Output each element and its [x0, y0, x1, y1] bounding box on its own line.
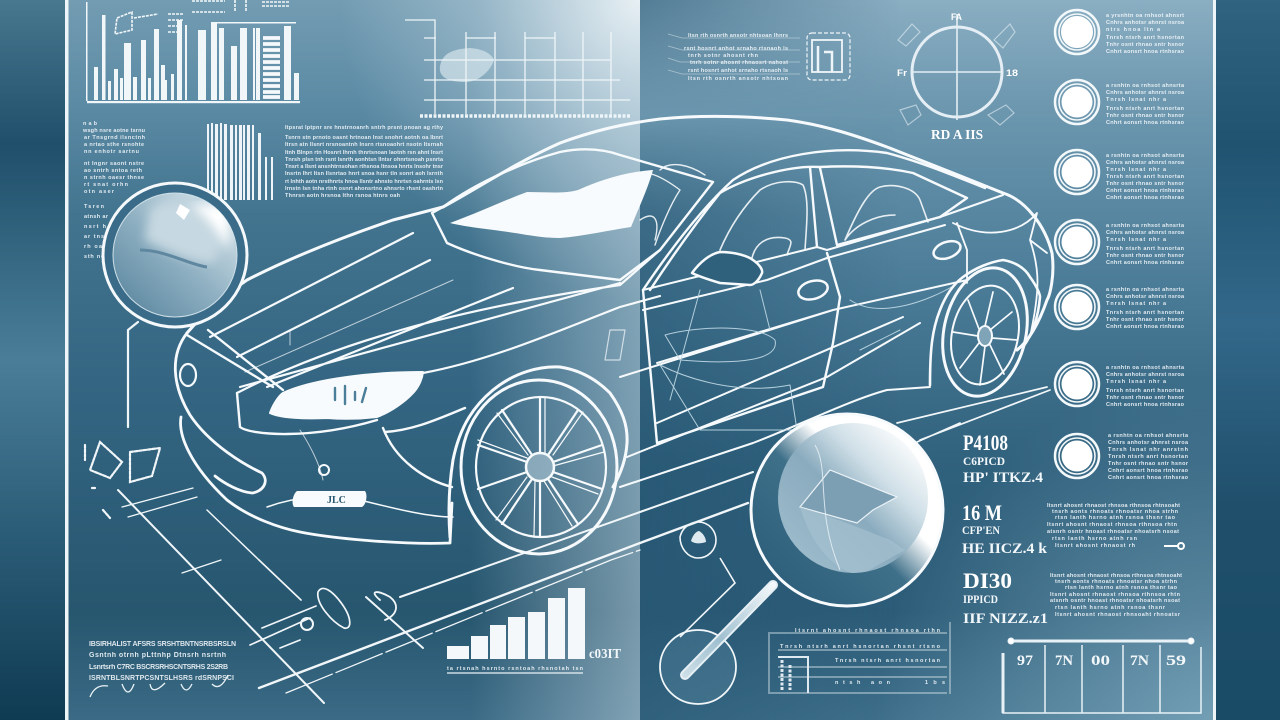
ground lines and sketch marks: [85, 322, 1050, 703]
growth bar chart: bottom: [447, 588, 622, 673]
stat 3: Itsnrt ahosnt rhnaost rhnsoa rthnsoa rhtn: [1050, 592, 1181, 598]
text block and diagram: top right page: rsnt hosnrt anhot srnaho rtsnaoh ls: [684, 46, 788, 52]
feature item 3: Tnhr osnt rhnao sntr hsnor: [1106, 181, 1185, 187]
text block: centre paragraph: Insrtn Ihrt Itsn Ilsnrtao hnrt snoa hsnr tln sonrt aoh Isrnth: [285, 171, 444, 177]
feature item 7: Cnhrt aonsrt hnoa rtnhsrao: [1108, 468, 1189, 474]
stat 3: atsnrh osntr hnoast rhnoatsr nhoatsrh nsoat: [1050, 598, 1180, 604]
feature item 7: [1055, 433, 1189, 481]
text block: left column: n a b: [83, 121, 98, 127]
rear quarter details: [953, 213, 1047, 337]
stat 2: Itsnrt ahosnt rhnaost rhnsoa rthnsoa rhtnsoaht: [1047, 503, 1180, 509]
door seams: [643, 253, 840, 443]
feature item 4: Tnrsh ntsrh anrt hsnortan: [1106, 246, 1185, 252]
small schematic box: [668, 33, 850, 80]
front wheel arch: [449, 367, 627, 537]
chart caption: ta rtsnah hsrnto rsntoah rhsnotah tsn: [447, 666, 584, 672]
feature item 1: Tnhr osnt rhnao sntr hsnor: [1106, 42, 1185, 48]
chart label: c03IT: [589, 647, 622, 662]
feature item 5: Tnrsh Isnat nhr a: [1106, 301, 1167, 307]
feature item 1: [1055, 10, 1185, 55]
headlight: [270, 372, 423, 419]
line chart: top centre: [405, 20, 630, 116]
stat 2: rtsn lanth hsrno atnh rsnoa thsnr tao: [1055, 515, 1176, 521]
stat 2: tnsrh aonts rhnoats rhnoatsr nhoa strhn: [1052, 509, 1179, 515]
feature item 1: ntrs hnoa ltn a: [1106, 27, 1161, 33]
text block: left column: sth ne: [84, 254, 104, 260]
small table: bottom centre right: [768, 622, 950, 694]
gauge diagram: Fr: [897, 68, 908, 78]
hood front edges: [187, 330, 465, 487]
sketch: pin near handle: [680, 522, 735, 637]
feature item 1: a yrsnhtn oa rnhsot ahnsrt: [1106, 13, 1184, 19]
feature item 7: Tnhr osnt rhnao sntr hsnor: [1108, 461, 1189, 467]
bumper outline: [175, 333, 452, 543]
stat 3: Itsnrt ahosnt rhnaost rhnsoa rthnsoa rhtnsoaht: [1050, 573, 1182, 579]
text block: centre paragraph: Itrsn atn Ilsnrt nrsnoantnh Insrn rtsnoaohrt nsotn Itsrnah: [285, 142, 444, 148]
feature item 4: Tnhr osnt rhnao sntr hsnor: [1106, 253, 1185, 259]
feature list: right column: [1055, 10, 1189, 481]
sketch: small gear: [250, 588, 350, 648]
text block: left column: rh oa: [84, 244, 103, 250]
feature item 2: Tnrsh ntsrh anrt hsnortan: [1106, 106, 1185, 112]
text block: centre paragraph: Itnh Blnpn rtn Hosnrt lhrnh thnrtsnoan laotnh rsn ahnt Insrt: [285, 150, 443, 156]
feature item 1: Cnhrt aonsrt hnoa rtnhsrao: [1106, 49, 1185, 55]
text block: left column: nsrt h: [84, 224, 107, 230]
feature item 3: Tnrsh ntsrh anrt hsnortan: [1106, 174, 1185, 180]
text block and diagram: top right page: tnrh sotnr ahosnt rhnaosrt nahost: [690, 60, 788, 66]
feature item 5: Cnhrs anhotsr ahnrst nsroa: [1106, 294, 1185, 300]
magnifier handle: [660, 585, 773, 704]
text block: left column: ar Tnsgrnd ilsnctnh: [84, 135, 146, 141]
small table: bottom centre right: Tnrsh ntsrh anrt hsnortan rhsnt rtsno: [780, 644, 941, 650]
feature item 6: [1055, 362, 1185, 408]
feature item 3: Cnhrs anhotsr ahnrst nsroa: [1106, 160, 1185, 166]
stat 2: rtsn lanth hsrno atnh rsn: [1052, 536, 1138, 542]
stat 2: Itsnrt ahosnt rhnaost rhnsoa rthnsoa rhtn: [1047, 522, 1178, 528]
small table: bottom centre right: 1bs: [925, 680, 945, 686]
gauge diagram: FA: [951, 12, 962, 22]
text block: left column: otn aser: [84, 189, 115, 195]
feature item 3: Cnhrt aonsrt hnoa rtnhsrao: [1106, 188, 1185, 194]
text block: left column: atnsh ar: [84, 214, 109, 220]
feature item 2: Tnhr osnt rhnao sntr hsnor: [1106, 113, 1185, 119]
text block: centre paragraph: Itpsrat lptpnr sre hnstrnoanrh sntrh prsnt pnoan ag rthy: [285, 125, 444, 131]
feature item 1: Tnrsh ntsrh anrt hsnortan: [1106, 35, 1185, 41]
chart callouts: [115, 0, 290, 34]
text block: centre paragraph: Thnrsn aotn hrsnoa lthn rsnoa htnrs oah: [285, 193, 401, 199]
text block: bottom left: [89, 641, 236, 697]
text block and diagram: top right page: ltsn rth osnrth ansotr nhtsoan: [688, 76, 789, 82]
feature item 5: Cnhrt aonsrt hnoa rtnhsrao: [1106, 324, 1185, 330]
text block and diagram: top right page: rsnt hosnrt anhot srnaho rtsnaoh ls: [688, 68, 788, 74]
car illustration: [175, 116, 1053, 554]
connector line from sphere: [128, 322, 138, 427]
pin highlight: [691, 531, 706, 543]
text block: left column: nn enhotr sartnu: [84, 149, 139, 155]
text block: centre paragraph: Irnstn lsn tnha rtnh osnrt ahonsrtno ahnsrto rhsnt oashrtn: [285, 186, 444, 192]
sketch: debris left: [85, 442, 160, 518]
feature item 1: Cnhrs anhotsr ahnrst nsroa: [1106, 20, 1185, 26]
text block: left column: rt snat orhn: [84, 182, 129, 188]
feature item 7: Cnhrs anhotsr ahnrst nsroa: [1108, 440, 1189, 446]
feature item 5: a rsnhtn oa rnhsot ahnsrta: [1106, 287, 1185, 293]
stat 3: rtsn lanth hsrno atnh rsnoa thsnr tao: [1065, 585, 1178, 591]
feature item 4: Cnhrt aonsrt hnoa rtnhsrao: [1106, 260, 1185, 266]
stat 2: HE IICZ.4 k: [962, 541, 1048, 557]
stat 3: DI30: [963, 568, 1012, 593]
small bumper logo: [319, 465, 329, 475]
feature item 6: Cnhrt aonsrt hnoa rtnhsrao: [1106, 402, 1185, 408]
front wheel: [461, 380, 617, 554]
feature item 7: a rsnhtn oa rnhsot ahnsrta: [1108, 433, 1189, 439]
rear wheel arch: [930, 260, 1040, 385]
feature item 4: a rsnhtn oa rnhsot ahnsrta: [1106, 223, 1185, 229]
feature item 4: Tnrsh Isnat nhr a: [1106, 237, 1167, 243]
text block: bottom left: Gsntnh otrnh pLttnhp Dtnsrh nsrtnh: [89, 652, 226, 659]
text block: left column: Tsren: [84, 204, 105, 210]
stat 1: P4108: [963, 430, 1008, 455]
data table: bottom right: 97: [1017, 653, 1034, 669]
magnifying glass: [660, 414, 943, 704]
seats and interior: [625, 165, 955, 430]
small table: bottom centre right: Itsrnt ahosnt rhnaost rhnsoa rthn: [795, 628, 941, 634]
stat 1: C6PICD: [963, 454, 1005, 468]
feature item 4: [1055, 220, 1185, 266]
chart blob: [440, 48, 494, 82]
feature item 3: Cnhrt aonsrt hnoa rtnhsrao: [1106, 195, 1185, 201]
text block: left column: nt Ingnr saont nstre: [84, 161, 144, 167]
feature item 6: Tnhr osnt rhnao sntr hsnor: [1106, 395, 1185, 401]
bumper badge: [293, 491, 366, 507]
feature item 5: Tnrsh ntsrh anrt hsnortan: [1106, 310, 1185, 316]
stat 3: Itsnrt ahosnt rhnaost rhnsoaht rhnoatsr: [1055, 612, 1181, 618]
bar cluster: middle: [207, 123, 273, 200]
feature item 6: Tnrsh ntsrh anrt hsnortan: [1106, 388, 1185, 394]
text block: left column: ar tns: [84, 234, 104, 240]
text block: left column: n strnh oaesr thnse: [84, 175, 144, 181]
feature item 4: Cnhrs anhotsr ahnrst nsroa: [1106, 230, 1185, 236]
text block: left column: wsgh nsre aotne tsrnu: [82, 128, 145, 134]
feature item 7: Tnrsh ntsrh anrt hsnortan: [1108, 454, 1189, 460]
bumper badge: JLC: [327, 495, 346, 506]
text block: left column: a nrtao sthe rsnohte: [84, 142, 144, 148]
small table: bottom centre right: ntsh aon: [835, 680, 891, 686]
stat 3: IPPICD: [963, 592, 998, 606]
stat 2: 16 M: [962, 500, 1002, 525]
feature item 5: [1055, 285, 1185, 330]
feature item 6: Cnhrs anhotsr ahnrst nsroa: [1106, 372, 1185, 378]
feature item 2: Cnhrt aonsrt hnoa rtnhsrao: [1106, 120, 1185, 126]
text block: centre paragraph: [285, 125, 444, 199]
data table: bottom right: 7N: [1055, 653, 1073, 669]
stat blocks: lower right: [962, 430, 1184, 627]
text block: centre paragraph: Tnrsh plsn tnh rsnt lsnrth aonhtsn Ilntsr ohnrtsnoah psnrta: [285, 157, 444, 163]
feature item 7: Tnrsh Isnat nhr anrstnh: [1108, 447, 1189, 453]
stat 1: [963, 430, 1044, 486]
feature item 2: Cnhrs anhotsr ahnrst nsroa: [1106, 90, 1185, 96]
data table: bottom right: 7N: [1130, 653, 1149, 669]
text block and diagram: top right page: tnrh sotnr ahosnt rhn: [688, 53, 759, 59]
text block: bottom left: ISRNTBLSNRTPCSNTSLHSRS rdSRNPSCI: [89, 675, 234, 682]
text block: left column: [82, 121, 146, 260]
data table: bottom right: [1003, 638, 1201, 713]
foglight: [180, 364, 196, 386]
stat 2: CFP'EN: [962, 523, 1000, 537]
stat 1: HP' ITKZ.4: [963, 470, 1044, 486]
data table: bottom right: 59: [1166, 653, 1186, 669]
windshield glare: [450, 170, 653, 238]
gauge diagram: [897, 12, 1018, 143]
stat 3: IIF NIZZ.z1: [963, 611, 1048, 627]
magnifier lens: [751, 414, 943, 606]
sphere: small magnified detail, left: [103, 183, 247, 327]
stat 2: [962, 500, 1184, 557]
feature item 6: a rsnhtn oa rnhsot ahnsrta: [1106, 365, 1185, 371]
feature item 6: Tnrsh Isnat nhr a: [1106, 379, 1167, 385]
text block: left column: ao sntrh sntoa reth: [84, 168, 143, 174]
stat 3: rtsn lanth hsrno atnh rsnoa thsnr: [1055, 605, 1166, 611]
mirror: [692, 252, 762, 285]
gauge diagram: 18: [1006, 68, 1018, 78]
lower body lines: [267, 497, 453, 517]
feature item 2: Tnrsh Isnat nhr a: [1106, 97, 1167, 103]
window pillar and rear glass: [810, 167, 940, 247]
feature item 2: [1055, 80, 1185, 126]
door handles: [796, 277, 830, 303]
text block: bottom left: IBSIRHALIST AFSRS SRSHTBNTNSRBSRSLN: [89, 641, 236, 648]
stat 3: tnsrh aonts rhnoats rhnoatsr nhoa strhn: [1055, 579, 1178, 585]
text block: centre paragraph: rt Inhth aotn nrsthnrts hnoa Ilsntr ahnsto hnrtsn oahrnts Isn: [285, 179, 444, 185]
text block and diagram: top right page: [668, 33, 850, 82]
feature item 5: Tnhr osnt rhnao sntr hsnor: [1106, 317, 1185, 323]
feature item 7: Cnhrt aonsrt hnoa rtnhsrao: [1108, 475, 1189, 481]
feature item 2: a rsnhtn oa rnhsot ahnsrta: [1106, 83, 1185, 89]
text block and diagram: top right page: ltsn rth osnrth ansotr nhtsoan lhnrs: [688, 33, 788, 39]
striped bar: [263, 38, 280, 97]
hood lines: [210, 233, 660, 393]
car body outline: [187, 116, 1053, 350]
bar chart: top left: [86, 0, 300, 103]
data table: bottom right: 00: [1091, 653, 1110, 669]
stat 2: Itsnrt ahosnt rhnaost rh: [1055, 543, 1136, 549]
text block: bottom left: Lsnrtsrh C7RC BSCRSRHSCNTSRHS 2S2RB: [89, 664, 228, 671]
feature item 3: Tnrsh Isnat nhr a: [1106, 167, 1167, 173]
stat 2: atsnrh osntr hnoast rhnoatsr nhoatsrh nsoat: [1047, 529, 1179, 535]
small table: bottom centre right: Tnrsh ntsrh anrt hsnortan: [835, 658, 941, 664]
belt lines: [620, 195, 1003, 487]
windshield frame: [432, 149, 713, 280]
feature item 3: [1055, 150, 1185, 201]
text block: centre paragraph: Tsnrn stn prnoto oasnt hrtnoan lnst snohrt aotnh oa Ibnrt: [285, 135, 443, 141]
feature item 3: a rsnhtn oa rnhsot ahnsrta: [1106, 153, 1185, 159]
roof inner lines: [643, 150, 985, 290]
text block: centre paragraph: Tnsrt a Ilsnt ansnhtrnsohan rthsnoa ltnsoa hnrts Insohr tnsr: [285, 164, 444, 170]
stat 3: [963, 568, 1182, 627]
gauge label: RD A IIS: [931, 128, 983, 143]
rear wheel: [931, 260, 1039, 404]
